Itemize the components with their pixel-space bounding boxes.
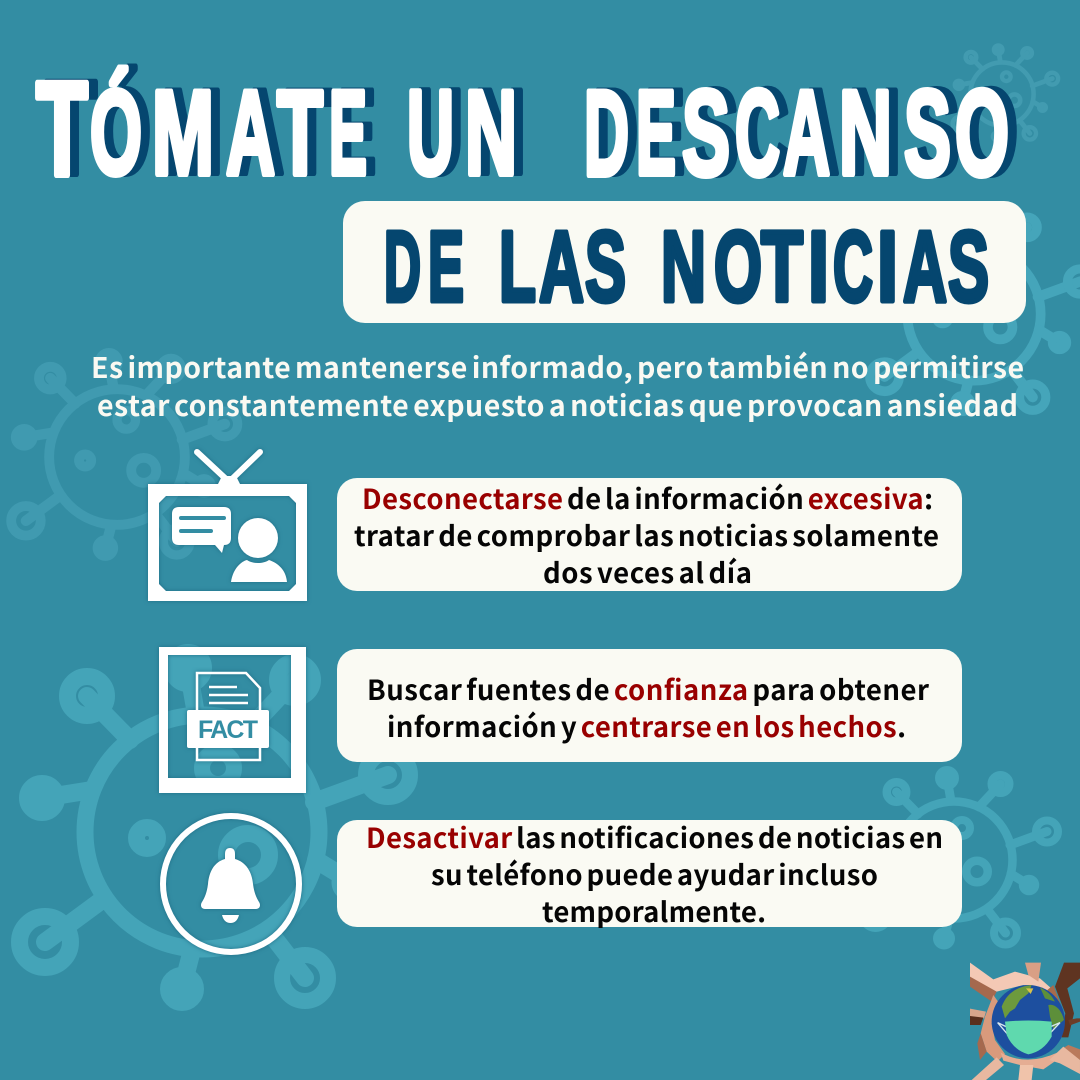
subtitle banner: de las noticias: S bbox=[948, 211, 989, 323]
intro text bbox=[91, 346, 1024, 425]
subtitle banner: de las noticias: C bbox=[833, 211, 873, 323]
card: buscar fuentes: información y centrarse en los hechos. bbox=[387, 705, 906, 745]
title: Tómate un descanso: E bbox=[329, 66, 367, 200]
title: Tómate un descanso: U bbox=[407, 66, 454, 200]
subtitle banner: de las noticias: D bbox=[384, 211, 421, 323]
title: Tómate un descanso: O bbox=[955, 65, 1009, 201]
intro text: Es importante mantenerse informado, pero también no permitirse bbox=[91, 346, 1024, 387]
title: Tómate un descanso bbox=[36, 55, 1009, 204]
icon: fact document: FACT bbox=[198, 716, 258, 744]
title: Tómate un descanso: Ó bbox=[90, 66, 142, 200]
title: Tómate un descanso: C bbox=[735, 65, 780, 201]
title: Tómate un descanso: A bbox=[226, 66, 275, 200]
title: Tómate un descanso: M bbox=[152, 66, 214, 200]
icon: television with presenter bbox=[148, 452, 307, 601]
subtitle banner: de las noticias: T bbox=[761, 211, 803, 323]
card: buscar fuentes: Buscar fuentes de confianza para obtener bbox=[367, 668, 930, 708]
card: buscar fuentes bbox=[337, 649, 962, 762]
title: Tómate un descanso: A bbox=[783, 66, 830, 200]
decorative virus: large bottom left bbox=[20, 654, 410, 1002]
card: desactivar: su teléfono puede ayudar incluso bbox=[431, 853, 878, 893]
title: Tómate un descanso: S bbox=[682, 65, 730, 201]
decorative virus: left bbox=[11, 353, 238, 556]
subtitle banner: de las noticias: I bbox=[808, 211, 829, 323]
card: desactivar: temporalmente. bbox=[542, 890, 766, 930]
card: desconectarse bbox=[337, 477, 962, 591]
title: Tómate un descanso: N bbox=[839, 66, 892, 200]
decorative virus: bottom right bbox=[863, 771, 1058, 945]
title: Tómate un descanso: E bbox=[636, 66, 676, 200]
title: Tómate un descanso: D bbox=[584, 65, 629, 201]
subtitle banner: de las noticias: O bbox=[714, 211, 762, 323]
card: desactivar bbox=[337, 816, 962, 930]
intro text: estar constantemente expuesto a noticias que provocan ansiedad bbox=[97, 384, 1018, 425]
subtitle banner: de las noticias bbox=[343, 201, 1026, 323]
subtitle banner: de las noticias: A bbox=[903, 211, 947, 323]
subtitle banner: de las noticias: I bbox=[877, 211, 898, 323]
logo: globe with mask and hands bbox=[970, 963, 1080, 1080]
card: desactivar: Desactivar las notificaciones de noticias en bbox=[366, 816, 943, 856]
title: Tómate un descanso: T bbox=[277, 66, 323, 200]
decorative virus: top right bbox=[953, 46, 1058, 140]
subtitle banner: de las noticias: S bbox=[585, 211, 626, 323]
subtitle banner: de las noticias: A bbox=[539, 211, 584, 323]
card: desconectarse: tratar de comprobar las noticias solamente bbox=[354, 514, 939, 554]
title: Tómate un descanso: N bbox=[465, 66, 517, 200]
subtitle banner: de las noticias: N bbox=[661, 211, 706, 323]
icon: notification bell bbox=[163, 816, 299, 952]
decorative virus: right bbox=[870, 212, 1080, 411]
title: Tómate un descanso: T bbox=[36, 55, 88, 204]
icon: fact document bbox=[159, 647, 306, 793]
card: desconectarse: dos veces al día bbox=[543, 551, 752, 591]
title: Tómate un descanso: S bbox=[904, 65, 951, 201]
subtitle banner: de las noticias: L bbox=[499, 211, 536, 323]
card: desconectarse: Desconectarse de la información excesiva: bbox=[362, 477, 933, 517]
subtitle banner: de las noticias: E bbox=[428, 211, 464, 323]
